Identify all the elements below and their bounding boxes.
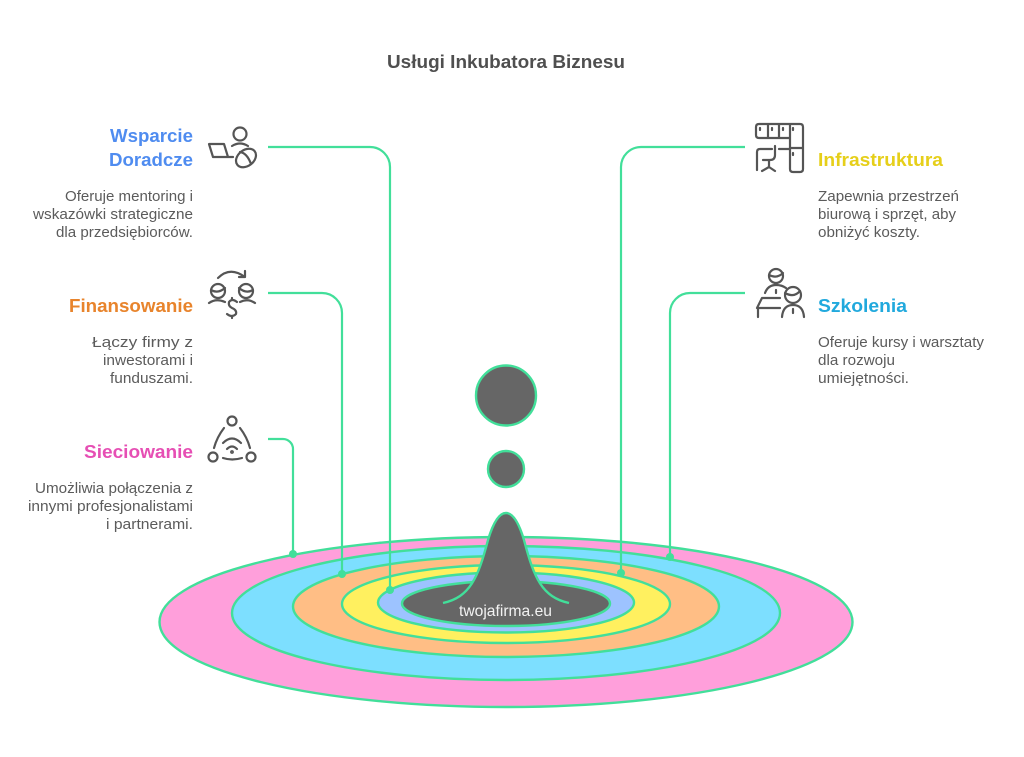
ring: Finansowanie <box>293 556 719 657</box>
text block: dla rozwoju <box>818 352 895 369</box>
large droplet <box>476 366 536 426</box>
text block: Łączy firmy z <box>92 334 193 351</box>
bell peak <box>443 513 569 603</box>
panel: Infrastruktura <box>756 124 959 241</box>
text block <box>28 480 193 533</box>
heading: Wsparcie <box>110 125 193 146</box>
text block: inwestorami i <box>103 352 193 369</box>
connector: Infrastruktura <box>617 147 745 577</box>
icon: trainer and student <box>757 269 804 317</box>
text block: i partnerami. <box>106 516 193 533</box>
text block: Zapewnia przestrzeń <box>818 188 959 205</box>
ring: Szkolenia <box>232 546 780 680</box>
panel: Finansowanie <box>69 271 255 387</box>
text block: obniżyć koszty. <box>818 224 920 241</box>
text block: umiejętności. <box>818 370 909 387</box>
text block: Oferuje mentoring i <box>65 188 193 205</box>
center label: twojafirma.eu <box>459 603 552 620</box>
text block: dla przedsiębiorców. <box>56 224 193 241</box>
small droplet <box>488 451 524 487</box>
panel: Szkolenia <box>757 269 984 387</box>
connector: Wsparcie Doradcze <box>268 147 394 594</box>
text block <box>92 334 193 387</box>
ring: Sieciowanie <box>160 537 852 707</box>
panel: Wsparcie Doradcze <box>32 125 260 241</box>
ring: Wsparcie Doradcze <box>378 572 634 632</box>
text block: Umożliwia połączenia z <box>35 480 193 497</box>
text block <box>818 334 984 387</box>
heading: Finansowanie <box>69 295 193 316</box>
icon: office furniture <box>756 124 803 172</box>
text block: Oferuje kursy i warsztaty <box>818 334 984 351</box>
concentric ellipses <box>160 537 852 707</box>
text block: innymi profesjonalistami <box>28 498 193 515</box>
heading: Doradcze <box>109 149 193 170</box>
connector: Szkolenia <box>666 293 745 561</box>
connector: Finansowanie <box>268 293 346 578</box>
title: Usługi Inkubatora Biznesu <box>387 51 625 72</box>
text block <box>818 188 959 241</box>
text block <box>32 188 193 241</box>
text block: funduszami. <box>110 370 193 387</box>
text block: biurową i sprzęt, aby <box>818 206 956 223</box>
heading: Sieciowanie <box>84 441 193 462</box>
heading: Szkolenia <box>818 295 908 316</box>
icon: network <box>208 416 256 462</box>
heading: Infrastruktura <box>818 149 944 170</box>
icon: investors and dollar <box>209 271 255 318</box>
text block: wskazówki strategiczne <box>32 206 193 223</box>
panel: Sieciowanie <box>28 416 256 533</box>
icon: laptop and person <box>209 128 260 171</box>
ring: Infrastruktura <box>342 565 670 643</box>
connector: Sieciowanie <box>268 439 297 558</box>
heading <box>109 125 193 170</box>
center ellipse <box>402 581 610 626</box>
